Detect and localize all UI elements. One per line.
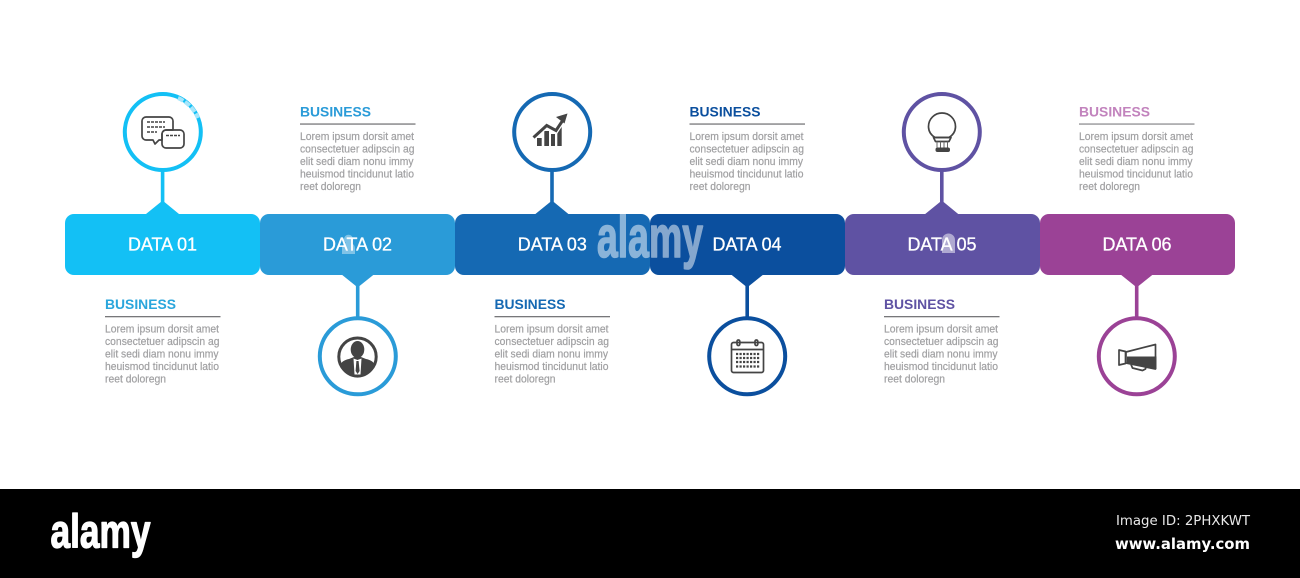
data bar 05 [845, 214, 1040, 275]
text block: step 02: heuismod tincidunut latio [300, 168, 414, 180]
text block: step 04: consectetuer adipscin ag [690, 144, 804, 156]
icon circle: businessman [320, 318, 396, 394]
data bar 03 [455, 214, 650, 275]
text block: step 02: BUSINESS [300, 104, 371, 120]
watermark: fragment on data 05 [942, 234, 955, 253]
icon circle: chat bubbles [125, 94, 201, 170]
panel: step 04 [650, 104, 845, 394]
text block: step 04: elit sedi diam nonu immy [690, 156, 803, 168]
text block: step 05: elit sedi diam nonu immy [884, 348, 998, 360]
text block: step 06: consectetuer adipscin ag [1079, 144, 1194, 156]
data bar 03: DATA 03 [518, 234, 587, 254]
text block: step 03: elit sedi diam nonu immy [494, 348, 608, 360]
text block: step 01: consectetuer adipscin ag [105, 336, 220, 348]
connector: step 06 [1120, 274, 1154, 318]
text block: step 04: reet doloregn [690, 181, 750, 193]
data bar 06 [1040, 214, 1235, 275]
text block: step 05 [884, 296, 1000, 386]
text block: step 06: reet doloregn [1079, 181, 1140, 193]
footer band [0, 489, 1300, 578]
panel: step 01 [65, 94, 260, 386]
data bar 01: DATA 01 [128, 234, 197, 254]
text block: step 05: Lorem ipsum dorsit amet [884, 324, 998, 336]
text block: step 06: Lorem ipsum dorsit amet [1079, 131, 1193, 143]
text block: step 04: heuismod tincidunut latio [690, 168, 804, 180]
panel: step 03 [455, 94, 650, 386]
data bar 05: DATA 05 [908, 234, 976, 254]
text block: step 04: Lorem ipsum dorsit amet [690, 131, 804, 143]
footer image id: Image ID: 2PHXKWT [1116, 513, 1251, 529]
data bar 04 [650, 214, 845, 275]
text block: step 06: elit sedi diam nonu immy [1079, 156, 1193, 168]
connector: step 05 [925, 170, 958, 214]
text block: step 02: consectetuer adipscin ag [300, 144, 414, 156]
connector: step 02 [341, 274, 374, 318]
connector: step 04 [730, 274, 764, 318]
data bar 02 [260, 214, 455, 275]
text block: step 01: Lorem ipsum dorsit amet [105, 324, 219, 336]
data bar 06: DATA 06 [1102, 234, 1172, 254]
text block: step 05: reet doloregn [884, 374, 945, 386]
footer logo: alamy [50, 504, 150, 558]
icon circle: megaphone [1099, 318, 1175, 394]
panel: step 02 [260, 104, 455, 394]
text block: step 01: heuismod tincidunut latio [105, 361, 219, 373]
connector: step 03 [535, 170, 568, 214]
text block: step 02: elit sedi diam nonu immy [300, 156, 414, 168]
text block: step 03: reet doloregn [494, 374, 556, 386]
text block: step 05: heuismod tincidunut latio [884, 361, 998, 373]
text block: step 04: BUSINESS [690, 104, 760, 120]
text block: step 04 [690, 104, 805, 193]
icon circle: hot air balloon bulb [904, 94, 980, 170]
data bar 01 [65, 214, 260, 275]
text block: step 03: consectetuer adipscin ag [494, 336, 609, 348]
text block: step 01: elit sedi diam nonu immy [105, 348, 219, 360]
text block: step 01 [105, 296, 220, 386]
text block: step 05: BUSINESS [884, 296, 955, 312]
text block: step 02: Lorem ipsum dorsit amet [300, 131, 414, 143]
data bar 04: DATA 04 [712, 234, 782, 254]
text block: step 03: heuismod tincidunut latio [494, 361, 608, 373]
text block: step 06: BUSINESS [1079, 104, 1150, 120]
text block: step 03: Lorem ipsum dorsit amet [494, 324, 608, 336]
text block: step 01: reet doloregn [105, 374, 166, 386]
icon circle: calendar [709, 318, 785, 394]
footer website: www.alamy.com [1115, 535, 1250, 553]
text block: step 01: BUSINESS [105, 296, 176, 312]
text block: step 03: BUSINESS [494, 296, 566, 312]
text block: step 06: heuismod tincidunut latio [1079, 168, 1193, 180]
panel: step 05 [845, 94, 1040, 386]
connector: step 01 [146, 170, 179, 214]
watermark: centre logo: alamy [597, 205, 703, 270]
panel: step 06 [1040, 104, 1235, 394]
text block: step 06 [1079, 104, 1194, 193]
text block: step 02 [300, 104, 416, 193]
watermark: fragment on data 02 [342, 235, 355, 254]
text block: step 02: reet doloregn [300, 181, 361, 193]
data bar 02: DATA 02 [323, 234, 392, 254]
icon circle: growth chart [514, 94, 590, 170]
text block: step 05: consectetuer adipscin ag [884, 336, 998, 348]
text block: step 03 [494, 296, 610, 386]
